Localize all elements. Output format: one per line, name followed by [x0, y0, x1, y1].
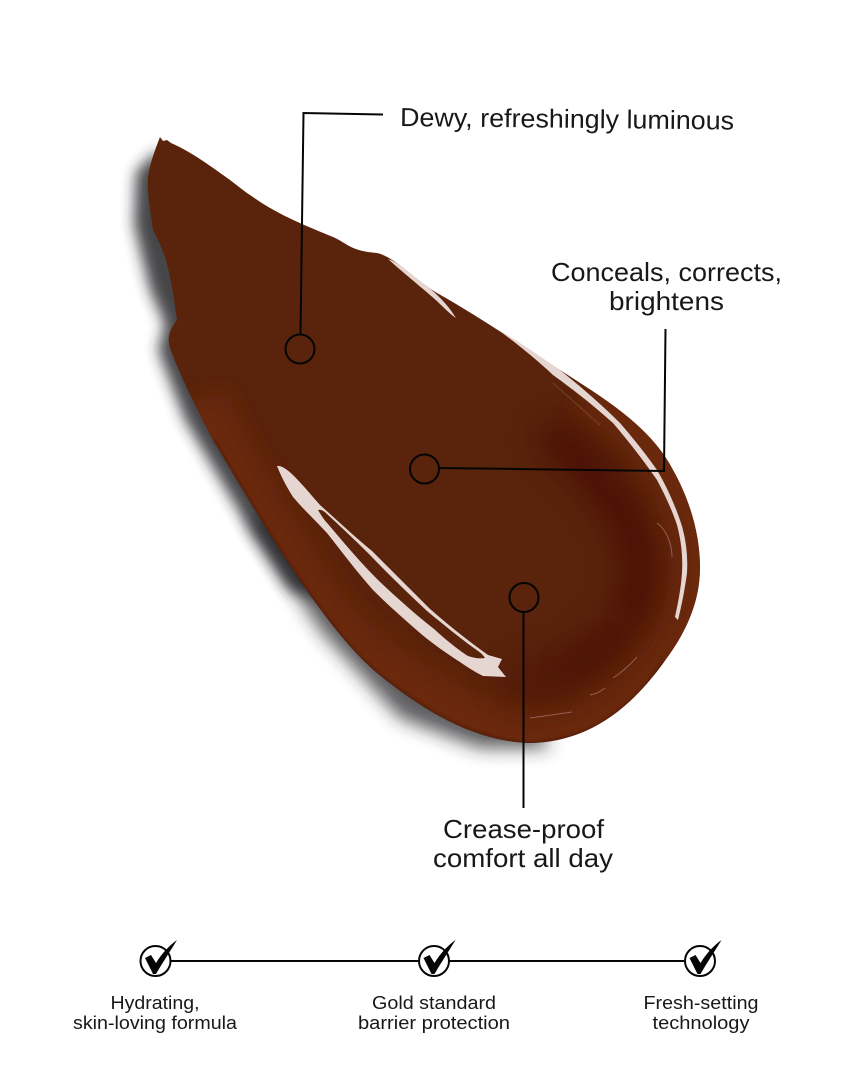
- foundation swatch: [134, 137, 700, 748]
- connector line: [171, 960, 684, 962]
- glossy highlights: [277, 259, 687, 677]
- callout: conceals, corrects, brightens: [410, 257, 782, 484]
- callout leader line and marker: [410, 329, 666, 484]
- benefits timeline: [73, 940, 758, 1033]
- callout: crease-proof comfort all day: [433, 583, 613, 873]
- benefit label: [644, 993, 758, 1033]
- callout label: Crease-proof: [443, 814, 605, 844]
- benefit label: skin-loving formula: [73, 1013, 238, 1033]
- callout label: [551, 257, 782, 316]
- benefit label: [358, 993, 510, 1033]
- icon: check circle: [419, 940, 456, 976]
- highlight: top ridge: [388, 259, 456, 318]
- benefit label: technology: [652, 1013, 750, 1033]
- benefit label: Gold standard: [372, 993, 496, 1013]
- callout label: comfort all day: [433, 843, 613, 873]
- callout leader line and marker: [510, 583, 538, 808]
- callout label: Conceals, corrects,: [551, 257, 782, 287]
- icon: check circle: [685, 940, 722, 976]
- callout: dewy, refreshingly luminous: [286, 102, 734, 364]
- benefit: fresh-setting technology: [644, 940, 758, 1033]
- benefit label: Hydrating,: [110, 993, 200, 1013]
- icon: check circle: [140, 940, 177, 976]
- callout label: [433, 814, 613, 873]
- benefit: hydrating: [73, 940, 238, 1033]
- benefit label: [73, 993, 238, 1033]
- swatch drop shadow: [134, 150, 550, 748]
- highlight: lower left streak: [277, 466, 506, 677]
- benefit label: barrier protection: [358, 1013, 510, 1033]
- callout leader line and marker: [286, 113, 383, 364]
- callout label: Dewy, refreshingly luminous: [400, 102, 734, 135]
- swatch body: [148, 137, 700, 743]
- callout label: brightens: [609, 286, 724, 316]
- benefit: barrier protection: [358, 940, 510, 1033]
- fine highlight lines: [530, 383, 672, 718]
- benefit label: Fresh-setting: [644, 993, 758, 1013]
- swatch shading: [200, 385, 697, 743]
- highlight: upper right rim: [497, 329, 687, 620]
